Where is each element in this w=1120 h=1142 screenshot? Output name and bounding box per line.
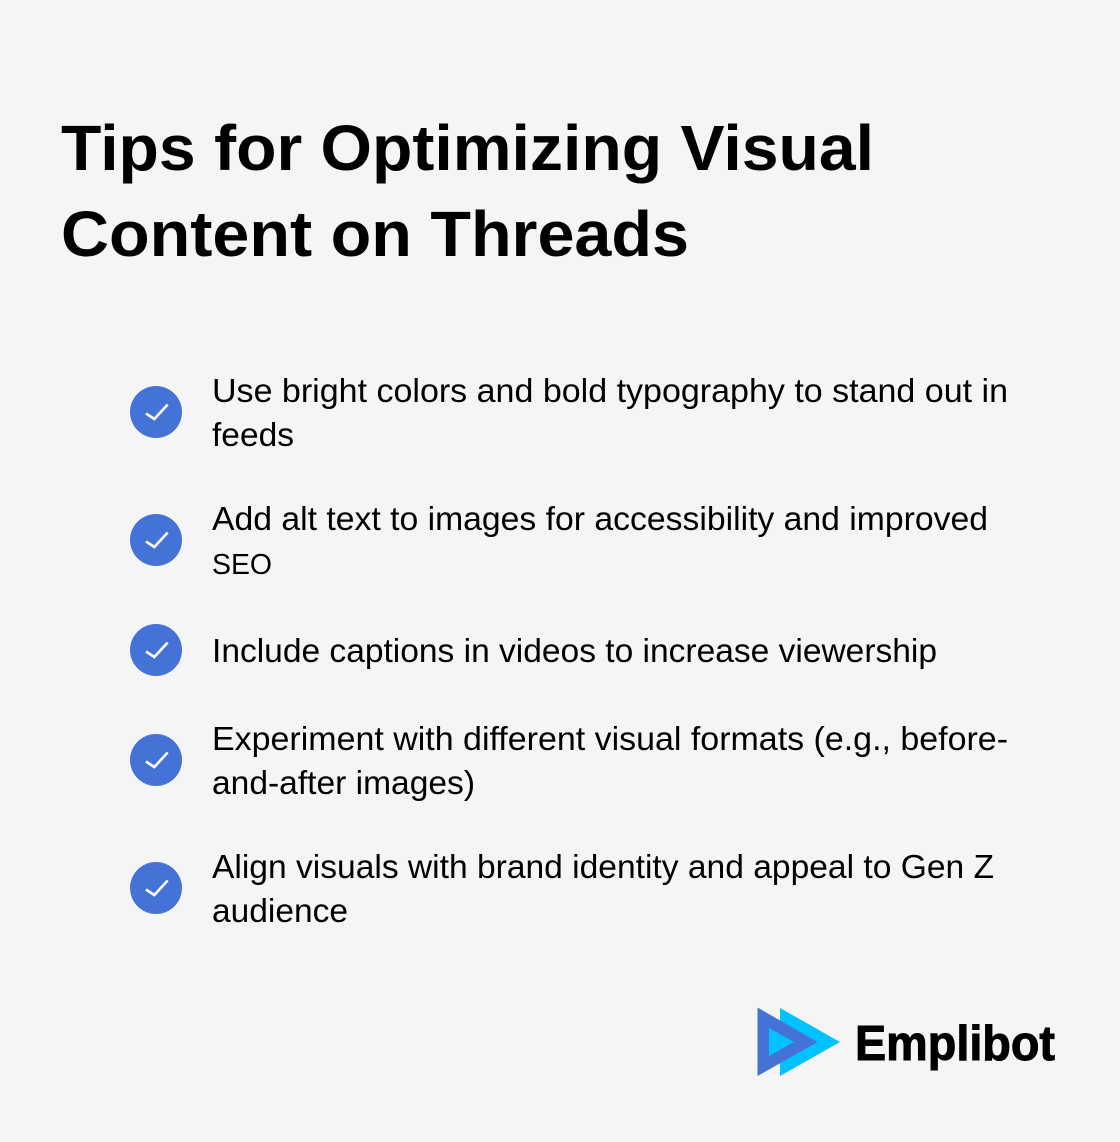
icon: check 3 <box>130 624 182 676</box>
icon: check 2 <box>130 514 182 566</box>
title: Tips for Optimizing Visual <box>61 112 874 184</box>
list item 3 <box>130 624 937 676</box>
text: item 5: Align visuals with brand identity and appeal to Gen Z <box>212 848 994 885</box>
text: item 2: SEO <box>212 549 272 581</box>
text: item 4 <box>212 720 1008 801</box>
list item 2 <box>130 500 988 581</box>
icon: check 4 <box>130 734 182 786</box>
checklist <box>130 372 1008 929</box>
text: item 2 <box>212 500 988 581</box>
list item 4 <box>130 720 1008 801</box>
text: item 4: Experiment with different visual formats (e.g., before- <box>212 720 1008 757</box>
title <box>61 112 874 270</box>
icon: check 5 <box>130 862 182 914</box>
wordmark: Emplibot <box>855 1017 1055 1071</box>
text: item 1: Use bright colors and bold typography to stand out in <box>212 372 1008 409</box>
icon: play triangles <box>758 1008 840 1076</box>
text: item 5: audience <box>212 892 348 929</box>
list item 5 <box>130 848 994 929</box>
text: item 1: feeds <box>212 416 294 453</box>
logo: Emplibot <box>758 1008 1055 1076</box>
text: item 2: Add alt text to images for accessibility and improved <box>212 500 988 537</box>
text: item 1 <box>212 372 1008 453</box>
icon: check 1 <box>130 386 182 438</box>
text: item 4: and-after images) <box>212 764 475 801</box>
text: item 3: Include captions in videos to increase viewership <box>212 632 937 669</box>
list item 1 <box>130 372 1008 453</box>
title: Content on Threads <box>61 198 689 270</box>
text: item 5 <box>212 848 994 929</box>
